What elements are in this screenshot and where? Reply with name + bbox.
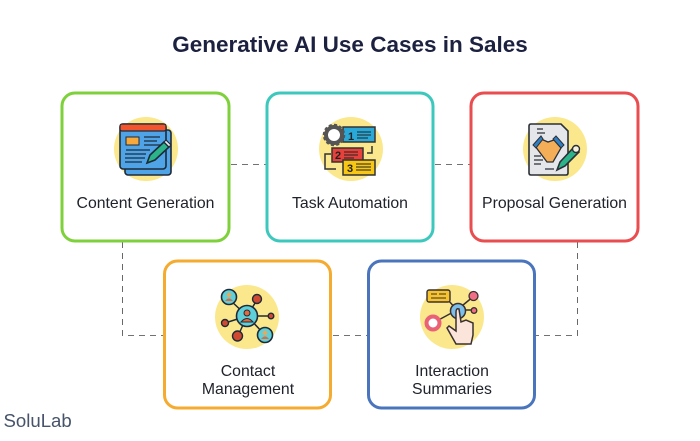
panel: contact management: [164, 261, 330, 408]
watermark: SoluLab: [4, 410, 72, 431]
label: Task Automation: [292, 195, 408, 212]
icon: hand tapping network: [420, 285, 484, 349]
title: Generative AI Use Cases in Sales: [172, 32, 528, 57]
panel: interaction summaries: [368, 261, 534, 408]
label: Proposal Generation: [482, 195, 627, 212]
icon: contract and handshake: [523, 117, 587, 181]
icon: contact network: [215, 285, 279, 349]
label: Content Generation: [77, 195, 214, 212]
label: Summaries: [412, 381, 492, 398]
panel: proposal generation: [471, 93, 638, 241]
icon: numbered task flow: 1: [348, 131, 354, 143]
label: Interaction: [415, 363, 489, 380]
icon: web page and pencil: [114, 117, 178, 181]
icon: numbered task flow: 2: [335, 150, 341, 162]
panel: content generation: [62, 93, 229, 241]
label: Management: [202, 381, 295, 398]
icon: numbered task flow: [319, 117, 383, 181]
icon: numbered task flow: 3: [347, 163, 353, 175]
panel: task automation: [267, 93, 433, 241]
label: Contact: [221, 363, 276, 380]
